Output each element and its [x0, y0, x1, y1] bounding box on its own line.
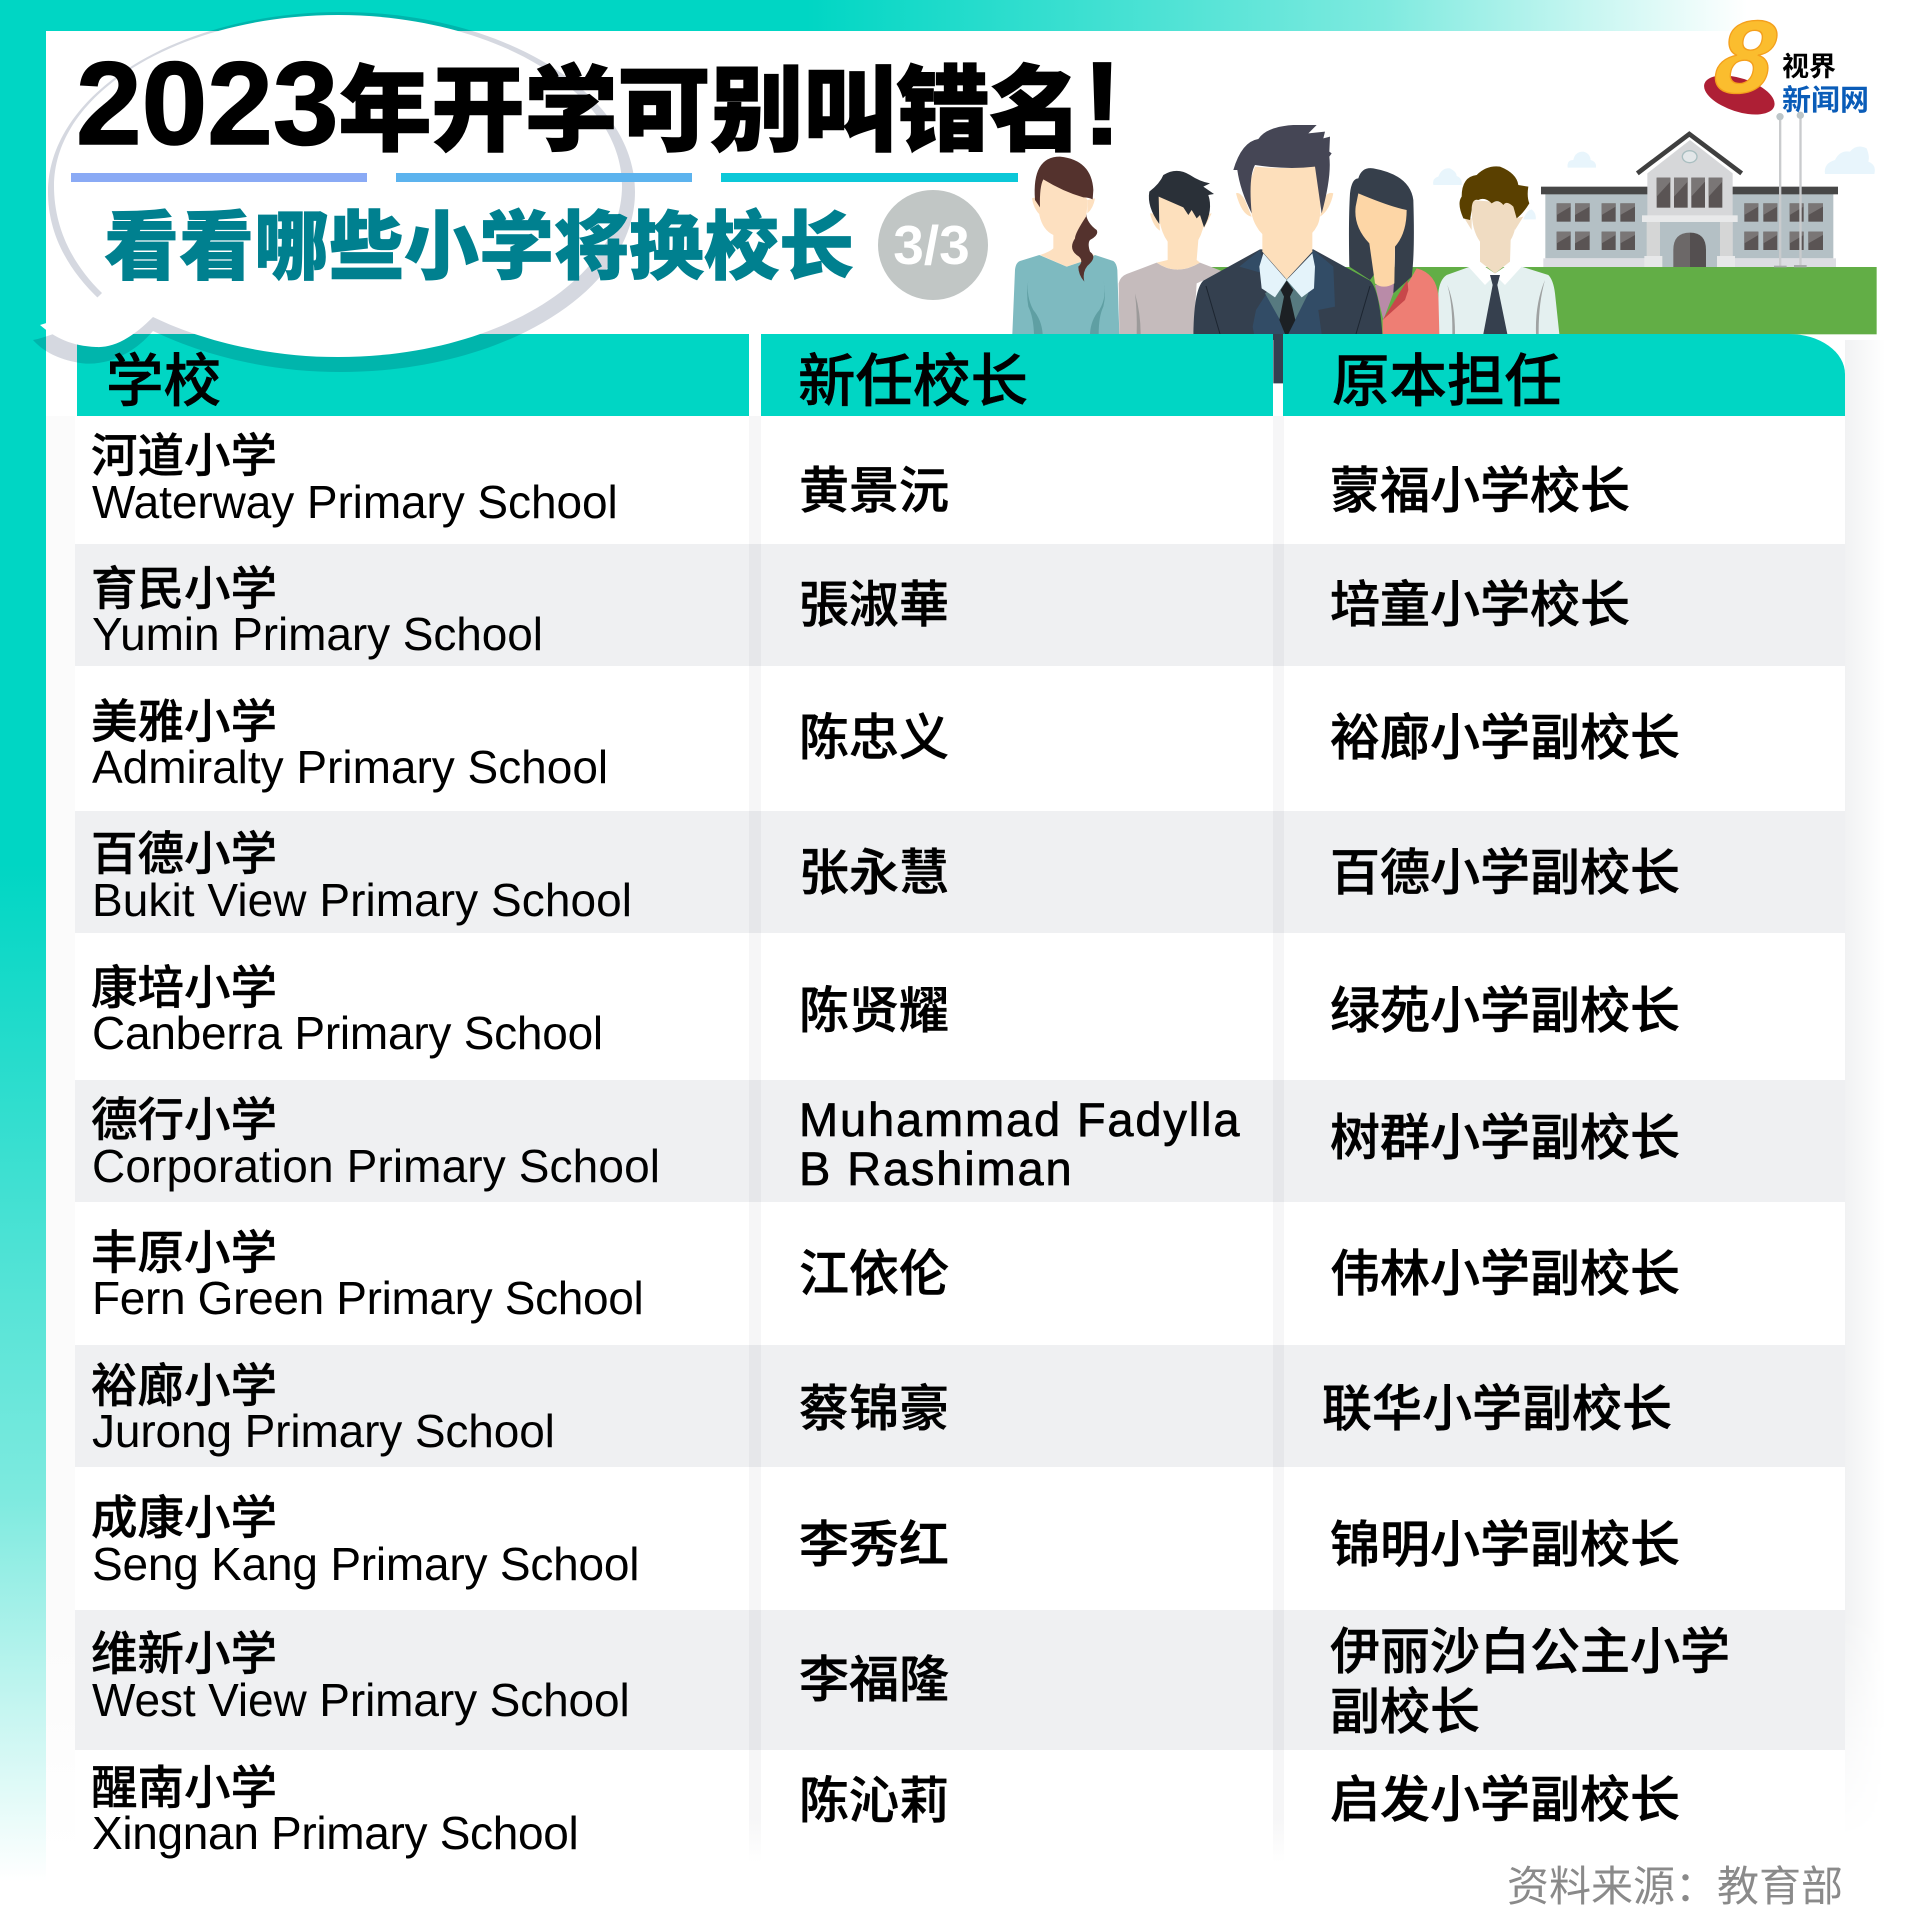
table row 10 — [75, 1610, 1845, 1750]
illustration: lawn, school, staff and logo — [1012, 0, 1877, 384]
person 2 — [1119, 171, 1223, 334]
logo text black: 视界 — [1782, 52, 1836, 82]
school name: 维新小学 — [91, 1628, 277, 1680]
previous post line 1: 伊丽沙白公主小学 — [1330, 1624, 1730, 1680]
label: new principal: 新任校长 — [798, 350, 1028, 414]
person 5 man with curly hair — [1438, 166, 1559, 334]
new principal: 陈贤耀 — [799, 983, 949, 1039]
icon: logo red disc and golden 8: 8 — [1708, 0, 1782, 116]
new principal: 蔡锦豪 — [799, 1381, 949, 1437]
table row 11 — [91, 1750, 1680, 1859]
clouds — [1433, 146, 1875, 219]
new principal: 江依伦 — [799, 1246, 949, 1302]
school name: 育民小学 — [91, 563, 277, 615]
title: 2023年开学可别叫错名! — [76, 35, 1122, 170]
label: previous post: 原本担任 — [1332, 350, 1562, 414]
new principal: 李秀红 — [799, 1517, 949, 1573]
school name: 美雅小学 — [91, 696, 277, 748]
previous post: 绿苑小学副校长 — [1330, 983, 1680, 1039]
icon: school scene — [1210, 112, 1877, 334]
person 4 woman — [1349, 168, 1442, 334]
person 1 woman — [1012, 157, 1119, 334]
new principal: 陈沁莉 — [799, 1773, 949, 1829]
previous post: 树群小学副校长 — [1330, 1110, 1680, 1166]
school name english: Jurong Primary School — [92, 1405, 555, 1457]
table row 7 — [91, 1202, 1680, 1345]
wings — [1545, 194, 1833, 258]
table row 5 — [91, 933, 1680, 1080]
logo text blue: 新闻网 — [1782, 84, 1869, 117]
table row 1 — [91, 416, 1630, 544]
school name english: Waterway Primary School — [92, 476, 618, 528]
central block — [1647, 140, 1733, 267]
soft side shadows of table — [46, 416, 75, 1856]
previous post: 培童小学校长 — [1330, 577, 1630, 633]
school name english: Seng Kang Primary School — [92, 1538, 639, 1590]
table header backgrounds — [77, 334, 1845, 416]
table row 2 — [75, 544, 1845, 666]
speech bubble behind title — [33, 12, 635, 372]
school name english: Fern Green Primary School — [92, 1272, 643, 1324]
icon: staff group — [1012, 125, 1442, 383]
flag poles — [1779, 117, 1781, 267]
teal gradient band: left — [0, 0, 46, 1920]
person 3 man in suit — [1193, 125, 1383, 383]
new principal: 陈忠义 — [799, 710, 949, 766]
school name: 德行小学 — [91, 1094, 277, 1146]
previous post: 蒙福小学校长 — [1330, 463, 1630, 519]
header cell: school — [77, 334, 749, 416]
school name english: Bukit View Primary School — [92, 874, 632, 926]
new principal: 李福隆 — [799, 1652, 949, 1708]
school name: 百德小学 — [91, 828, 277, 880]
school name english: West View Primary School — [92, 1674, 630, 1726]
previous post: 锦明小学副校长 — [1330, 1517, 1680, 1573]
school name: 醒南小学 — [91, 1762, 277, 1814]
heading labels — [106, 350, 1562, 414]
new principal line 1: Muhammad Fadylla — [799, 1093, 1241, 1146]
page badge 3/3 — [878, 190, 988, 300]
source note: 资料来源：教育部 — [1507, 1863, 1843, 1910]
divider bars — [71, 173, 1018, 182]
school name: 河道小学 — [91, 430, 277, 482]
table row 3 — [91, 666, 1680, 811]
school name: 丰原小学 — [91, 1227, 277, 1279]
previous post: 裕廊小学副校长 — [1330, 710, 1680, 766]
page badge 3/3: 3/3 — [893, 214, 970, 276]
school name: 成康小学 — [91, 1492, 277, 1544]
table row 9 — [91, 1467, 1680, 1610]
school name: 康培小学 — [91, 962, 277, 1014]
previous post: 伟林小学副校长 — [1330, 1246, 1680, 1302]
school name: 裕廊小学 — [91, 1360, 277, 1412]
table row 6 — [75, 1080, 1845, 1202]
new principal: 張淑華 — [799, 577, 949, 633]
new principal: 黄景沅 — [799, 463, 949, 519]
subtitle: 看看哪些小学将换校长 — [104, 186, 854, 295]
school name english: Admiralty Primary School — [92, 741, 608, 793]
lawn — [1210, 267, 1877, 334]
label: school: 学校 — [106, 350, 221, 414]
school name english: Corporation Primary School — [92, 1140, 660, 1192]
table row 8 — [75, 1345, 1845, 1467]
windows — [1557, 178, 1823, 250]
previous post line 2: 副校长 — [1330, 1684, 1480, 1740]
previous post: 启发小学副校长 — [1330, 1772, 1680, 1828]
school name english: Canberra Primary School — [92, 1007, 603, 1059]
header cell: previous post — [1283, 334, 1845, 416]
school name english: Yumin Primary School — [92, 608, 543, 660]
new principal: 张永慧 — [799, 845, 949, 901]
previous post: 百德小学副校长 — [1330, 845, 1680, 901]
table row 4 — [75, 811, 1845, 933]
header cell: new principal — [761, 334, 1273, 416]
previous post: 联华小学副校长 — [1322, 1381, 1672, 1437]
teal gradient band: top — [0, 0, 1920, 31]
school name english: Xingnan Primary School — [92, 1807, 578, 1859]
portico — [1642, 215, 1738, 222]
new principal line 2: B Rashiman — [799, 1142, 1074, 1195]
